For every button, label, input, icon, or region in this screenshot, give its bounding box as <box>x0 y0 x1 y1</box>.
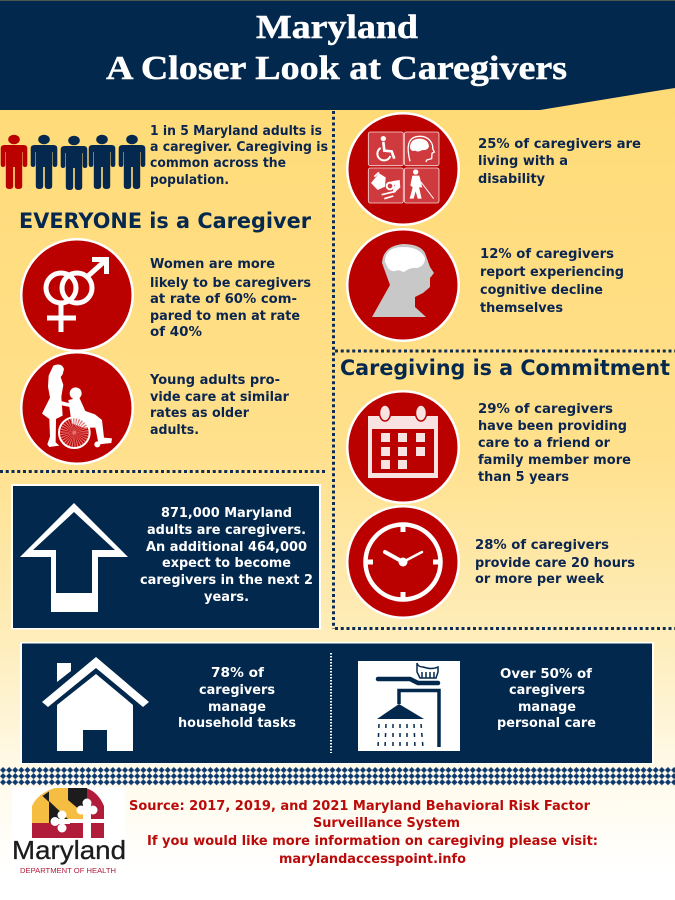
text: 5 years: care to a friend or <box>478 436 611 451</box>
text: 1 in 5 adults <box>150 124 328 188</box>
text: 5 years: family member more <box>478 453 631 468</box>
text: 1 in 5 adults: a caregiver. Caregiving is <box>150 140 328 155</box>
text: 1 in 5 adults: population. <box>150 173 229 188</box>
text: household tasks: 78% of <box>211 666 264 681</box>
text: disability: 25% of caregivers are <box>478 137 641 152</box>
text: young adults: Young adults pro- <box>149 373 280 388</box>
title: A Closer Look at Caregivers <box>106 50 567 87</box>
text: household tasks <box>178 666 296 731</box>
text: cognitive decline: cognitive decline <box>480 283 603 298</box>
footer: source and link: marylandaccesspoint.info <box>279 852 466 867</box>
text: women and men: Women are more <box>150 257 275 272</box>
text: cognitive decline: themselves <box>480 301 563 316</box>
text: disability: living with a <box>478 154 568 169</box>
text: personal care: Over 50% of <box>500 667 592 682</box>
text: young adults: rates as older <box>150 406 250 421</box>
text: cognitive decline <box>480 247 624 316</box>
footer: source and link: Source: 2017, 2019, and 2021 Maryland Behavioral Risk Factor <box>129 799 591 814</box>
heading: everyone is a caregiver: EVERYONE is a Caregiver <box>19 209 312 233</box>
text: personal care: personal care <box>497 716 596 731</box>
text: women and men <box>150 257 311 340</box>
icon: disability symbols <box>346 112 460 226</box>
text: 20 hours: provide care 20 hours <box>475 556 635 571</box>
logo shield <box>32 788 104 838</box>
text: 1 in 5 adults: common across the <box>150 156 286 171</box>
text: household tasks: manage <box>208 700 266 715</box>
text: caregiver counts: expect to become <box>162 556 291 571</box>
text: women and men: at rate of 60% com- <box>150 292 297 307</box>
text: women and men: pared to men at rate <box>150 309 300 324</box>
text: cognitive decline: 12% of caregivers <box>480 247 614 262</box>
logo: Maryland Department of Health: DEPARTMENT OF HEALTH <box>20 868 116 875</box>
text: 20 hours: or more per week <box>475 572 604 587</box>
text: 1 in 5 adults: 1 in 5 Maryland adults is <box>150 124 322 139</box>
logo: Maryland Department of Health <box>12 787 126 877</box>
icon: toothbrush and shower <box>358 661 460 751</box>
icon: head with brain <box>346 228 460 342</box>
text: young adults <box>149 373 290 438</box>
text: cognitive decline: report experiencing <box>480 265 624 280</box>
text: women and men: of 40% <box>150 325 202 340</box>
text: personal care: manage <box>518 700 576 715</box>
text: household tasks: caregivers <box>199 683 275 698</box>
text: 5 years: have been providing <box>478 419 627 434</box>
footer: source and link: If you would like more information on caregiving please visit: <box>147 834 598 849</box>
icon: caregiver with wheelchair <box>20 351 134 465</box>
panel: tasks managed <box>20 642 654 764</box>
text: caregiver counts: An additional 464,000 <box>146 540 307 555</box>
text: 5 years <box>478 402 631 485</box>
text: women and men: likely to be caregivers <box>150 276 311 291</box>
title: Maryland <box>256 9 418 46</box>
text: personal care: caregivers <box>509 683 585 698</box>
footer: source and link: Surveillance System <box>313 816 460 831</box>
text: household tasks: household tasks <box>178 716 296 731</box>
text: caregiver counts <box>140 506 313 605</box>
text: 5 years: than 5 years <box>478 470 569 485</box>
icon: house <box>42 657 149 751</box>
panel: 871,000 caregivers <box>11 484 321 630</box>
text: caregiver counts: 871,000 Maryland <box>161 506 292 521</box>
text: 20 hours: 28% of caregivers <box>475 538 609 553</box>
footer: source and link <box>129 799 598 867</box>
text: 5 years: 29% of caregivers <box>478 402 613 417</box>
text: caregiver counts: caregivers in the next 2 <box>140 573 313 588</box>
text: caregiver counts: years. <box>204 590 249 605</box>
icon: up arrow <box>20 503 128 612</box>
icon: clock <box>346 505 460 619</box>
icon: calendar <box>346 390 460 504</box>
text: disability <box>478 137 641 187</box>
dotted section dividers <box>0 111 675 629</box>
logo: Maryland Department of Health: Maryland <box>12 835 126 865</box>
text: caregiver counts: adults are caregivers. <box>147 523 306 538</box>
text: 20 hours <box>475 538 635 587</box>
icon: five people, one highlighted <box>1 135 145 190</box>
text: personal care <box>497 667 596 731</box>
header banner <box>0 0 675 110</box>
text: disability: disability <box>478 172 546 187</box>
text: young adults: vide care at similar <box>150 390 290 405</box>
title <box>106 9 567 87</box>
icon: gender symbols <box>20 238 134 352</box>
heading: caregiving is a commitment: Caregiving is a Commitment <box>340 356 670 380</box>
text: young adults: adults. <box>150 423 199 438</box>
